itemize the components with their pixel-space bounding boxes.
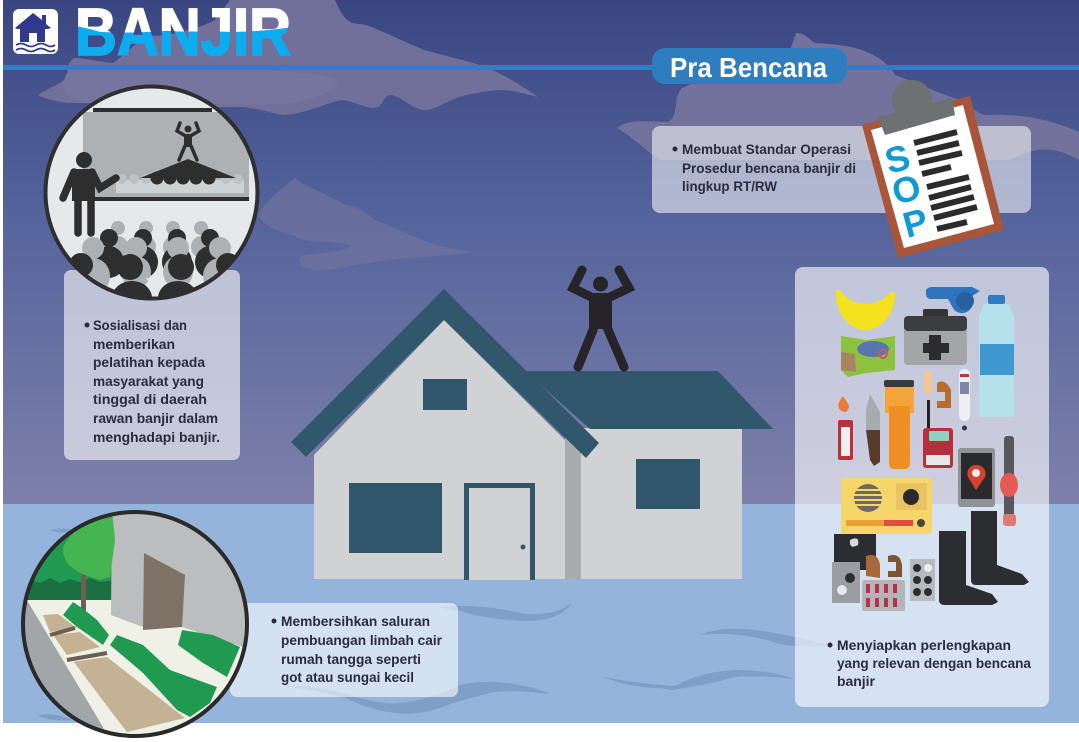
icon: bandage xyxy=(924,371,932,394)
sosialisasi text xyxy=(84,318,220,445)
SOP text: Membuat Standar Operasi xyxy=(682,142,851,157)
panel: sosialisasi xyxy=(64,270,240,460)
house: door xyxy=(464,483,535,580)
sosialisasi text: masyarakat yang xyxy=(93,374,204,389)
icon: training circle xyxy=(46,86,258,315)
perlengkapan text: yang relevan dengan bencana xyxy=(837,656,1031,671)
icon: SOP clipboard xyxy=(862,80,1004,258)
panel: SOP xyxy=(652,126,1031,213)
icon: gloves xyxy=(832,534,876,603)
perlengkapan text: Menyiapkan perlengkapan xyxy=(837,638,1011,653)
icon: whistle xyxy=(926,287,980,313)
sosialisasi text: tinggal di daerah xyxy=(93,392,207,407)
building door xyxy=(143,553,185,630)
SOP text: Prosedur bencana banjir di xyxy=(682,161,856,176)
icon: pill blister pack xyxy=(862,580,905,611)
icon: SOP clipboard: O xyxy=(887,166,925,213)
cloud: top left lobe xyxy=(64,68,338,105)
icon: lighter xyxy=(838,396,853,460)
hedge background xyxy=(34,531,112,583)
perlengkapan text xyxy=(828,638,1031,689)
canal covers xyxy=(43,614,77,632)
person on roof xyxy=(573,270,629,367)
icon: water bottle xyxy=(979,295,1014,417)
icon: carabiners xyxy=(866,555,902,578)
house: side strip xyxy=(565,425,581,579)
panel: saluran xyxy=(230,603,458,697)
sosialisasi text: rawan banjir dalam xyxy=(93,411,218,426)
header line xyxy=(3,65,1079,70)
house: attic window xyxy=(423,379,467,410)
icon: drainage circle xyxy=(15,505,250,740)
icon: phone with map pin xyxy=(958,448,995,507)
house xyxy=(291,289,773,580)
icon: tablet strip xyxy=(910,559,935,601)
icon: first aid kit xyxy=(904,309,967,365)
icon: flashlight xyxy=(884,380,914,469)
shrubs xyxy=(63,602,240,717)
retaining wall xyxy=(25,602,104,730)
house: gable roof xyxy=(291,289,599,458)
flood water xyxy=(3,504,1079,723)
SOP text: lingkup RT/RW xyxy=(682,179,777,194)
tree trunk xyxy=(81,572,86,612)
cloud: top left xyxy=(38,0,538,115)
building xyxy=(111,514,245,647)
icon: walkie talkie xyxy=(923,400,953,468)
icon: banana xyxy=(836,290,895,330)
icon: boots xyxy=(939,511,1029,605)
icon: thermometer xyxy=(959,369,970,430)
icon: yellow radio xyxy=(841,478,932,534)
projection screen xyxy=(83,108,249,201)
perlengkapan text: banjir xyxy=(837,674,876,689)
background sky xyxy=(3,0,1079,505)
house: right wing wall xyxy=(581,428,742,579)
cloud: middle xyxy=(258,178,472,270)
house: right window xyxy=(636,459,700,509)
saluran text: got atau sungai kecil xyxy=(281,670,414,685)
panel: perlengkapan xyxy=(795,267,1049,707)
house: right roof xyxy=(525,371,773,429)
saluran text: Membersihkan saluran xyxy=(281,614,430,629)
sosialisasi text: Sosialisasi dan xyxy=(93,318,187,333)
saluran text: rumah tangga seperti xyxy=(281,652,421,667)
icon: map xyxy=(841,336,895,377)
audience xyxy=(71,221,234,296)
logo icon xyxy=(13,9,58,54)
sosialisasi text: memberikan xyxy=(93,337,175,352)
sosialisasi text: pelatihan kepada xyxy=(93,355,205,370)
SOP text xyxy=(672,142,856,194)
sosialisasi text: menghadapi banjir. xyxy=(93,430,220,445)
icon: carabiner xyxy=(937,382,951,408)
water ripples xyxy=(37,528,827,720)
pill heading: Pra Bencana xyxy=(670,52,827,83)
house: front gable wall xyxy=(314,320,565,579)
presenter xyxy=(63,152,116,233)
icon: SOP clipboard: S xyxy=(880,136,914,182)
saluran text xyxy=(272,614,443,685)
house: left window xyxy=(349,483,442,553)
icon: SOP clipboard: P xyxy=(898,200,932,246)
icon: wristwatch xyxy=(1000,436,1018,526)
cloud: top right xyxy=(617,33,1079,160)
tree crown xyxy=(63,510,115,580)
saluran text: pembuangan limbah cair xyxy=(281,633,443,648)
icon: knife xyxy=(866,394,880,466)
title: BANJIR xyxy=(78,8,292,56)
